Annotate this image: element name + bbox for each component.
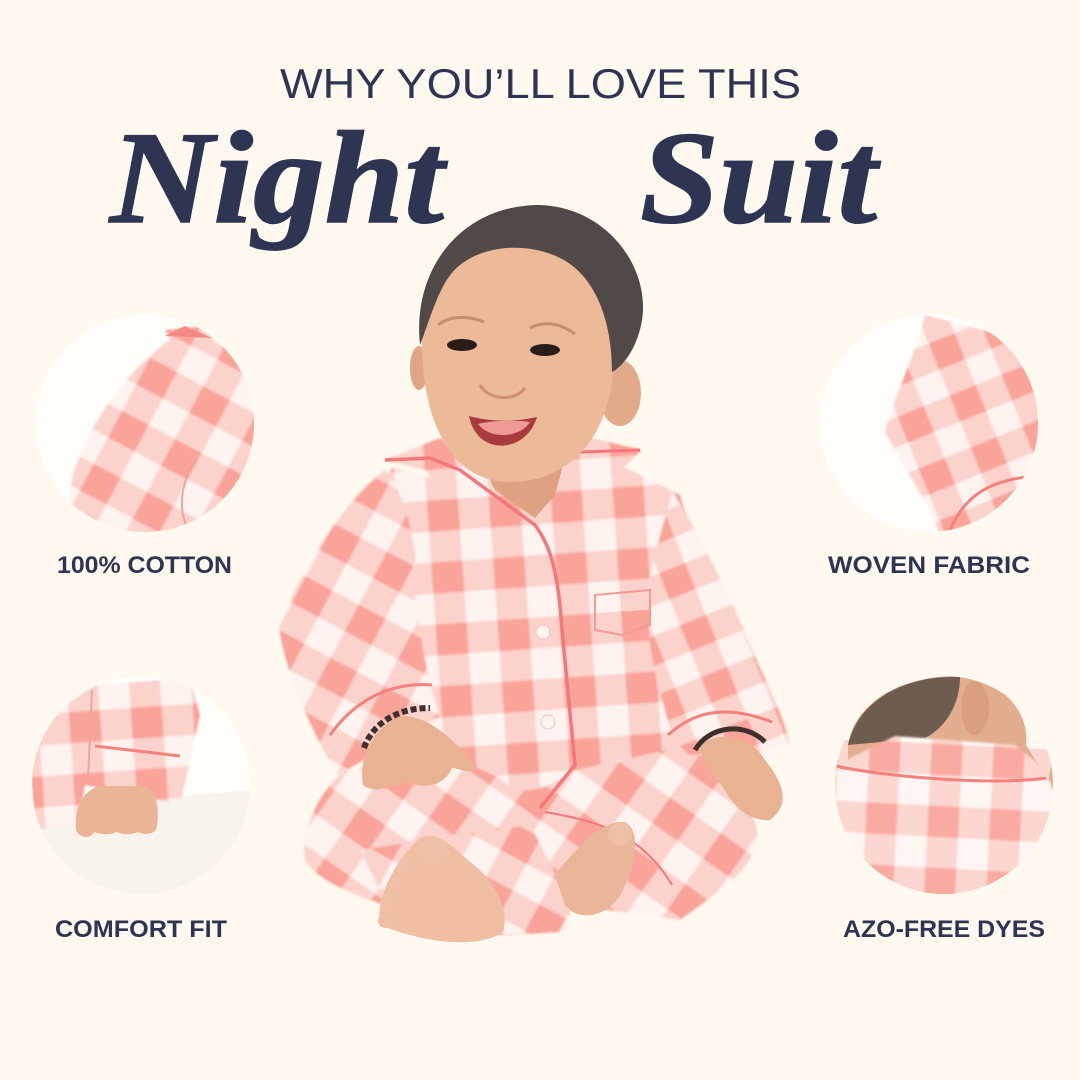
right sleeve [648,492,790,755]
right bracelet [695,729,765,750]
collar left [385,438,540,548]
detail circle: woven fabric [820,314,1040,535]
left foot [379,836,505,942]
heading: why you'll love this: WHY YOU’LL LOVE THIS [280,60,801,107]
right eyebrow [530,324,575,334]
pant centre crease [545,812,672,885]
buttons [536,625,555,729]
right hand [700,737,783,820]
right ear [599,360,641,426]
label: 100% cotton: 100% COTTON [57,552,232,579]
right cuff piping [668,712,772,735]
left eyebrow [438,317,484,325]
left sleeve [279,470,440,775]
left ear [410,346,428,390]
collar right [535,435,642,545]
right foot [555,822,635,915]
toes [378,822,632,928]
label: comfort fit: COMFORT FIT [55,916,227,943]
left eye [447,339,477,351]
left cuff piping [330,685,432,735]
label: azo-free dyes: AZO-FREE DYES [843,916,1045,943]
baby figure [279,205,790,942]
right eye [530,344,560,356]
left hand [362,716,476,789]
pajama pants [304,735,758,935]
mouth [469,416,537,446]
neck [480,440,570,518]
heading: suit: Suit [640,104,881,251]
label: woven fabric: WOVEN FABRIC [828,552,1030,579]
collar piping [580,450,640,452]
nose [480,385,525,397]
shirt body [364,455,697,790]
detail circle: azo-free dyes [835,676,1053,894]
icon: baby hand [76,786,158,837]
hair [419,205,643,372]
placket piping [385,458,575,808]
pocket [595,590,650,635]
detail circle: comfort fit [32,676,250,837]
left bracelet [364,708,430,748]
illustration layer [32,68,1053,942]
face [422,244,614,482]
detail circle: 100% cotton [36,314,260,535]
heading: night: Night [108,104,448,251]
tongue [478,421,530,435]
pant cuff fold [360,825,572,935]
infographic canvas [32,68,1053,942]
